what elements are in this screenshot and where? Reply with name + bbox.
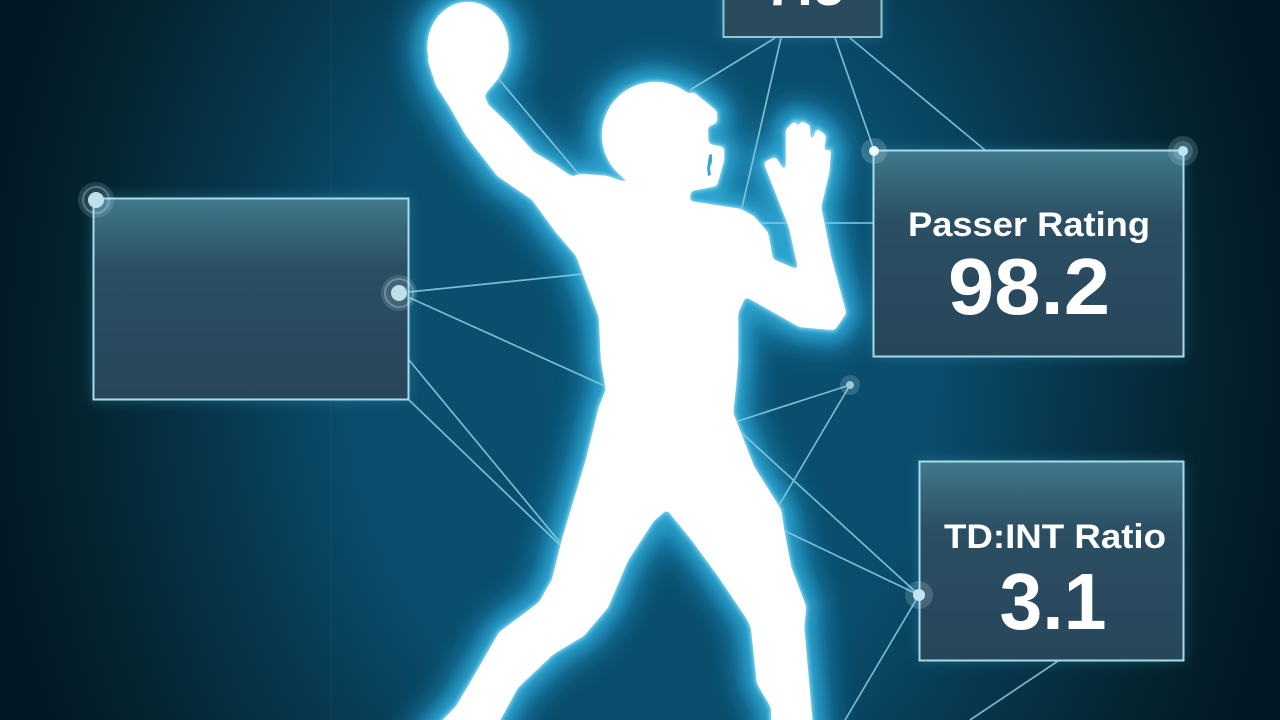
TD:INT value: 3.1 [1000,557,1106,646]
panel: top stat [723,0,882,37]
player silhouette [425,3,845,720]
panel: TD:INT ratio [919,461,1184,661]
TD:INT label: TD:INT Ratio [944,518,1166,556]
passer rating value: 98.2 [948,242,1110,331]
panel: passer rating [873,150,1184,357]
connector lines [399,38,1058,720]
node markers [78,136,1198,609]
facemask gaps [707,154,712,176]
panel: left empty [93,198,409,400]
passer rating label: Passer Rating [908,206,1150,244]
silhouette glow [425,3,845,720]
grid lines [330,0,332,720]
